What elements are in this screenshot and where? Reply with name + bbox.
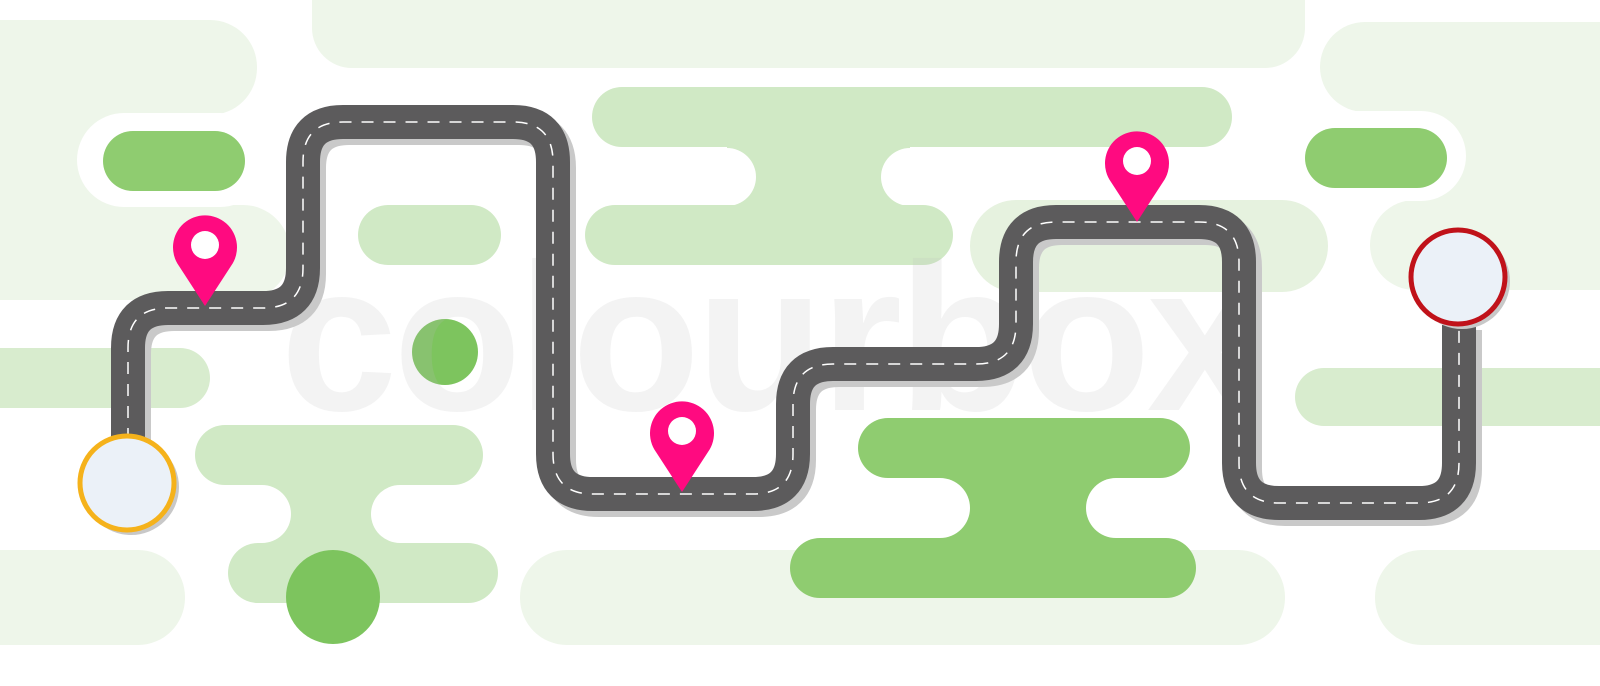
pin 2 (650, 401, 714, 492)
pale bottom (0, 550, 185, 645)
start circle (80, 436, 179, 535)
dark green pills (103, 131, 245, 191)
mid bands (0, 348, 210, 408)
medium bottom left shape (262, 478, 400, 550)
pale top band (312, 0, 1305, 68)
dark green bottom shape (940, 470, 1116, 546)
road (128, 122, 1465, 509)
pale left shapes (0, 20, 257, 115)
circles (412, 319, 478, 385)
pin 1 (173, 215, 237, 306)
watermark: colourbox (280, 220, 1263, 455)
pale right shapes (1320, 22, 1600, 112)
end circle (1411, 230, 1510, 329)
medium top center shape (727, 140, 910, 212)
pin 3 (1105, 131, 1169, 222)
